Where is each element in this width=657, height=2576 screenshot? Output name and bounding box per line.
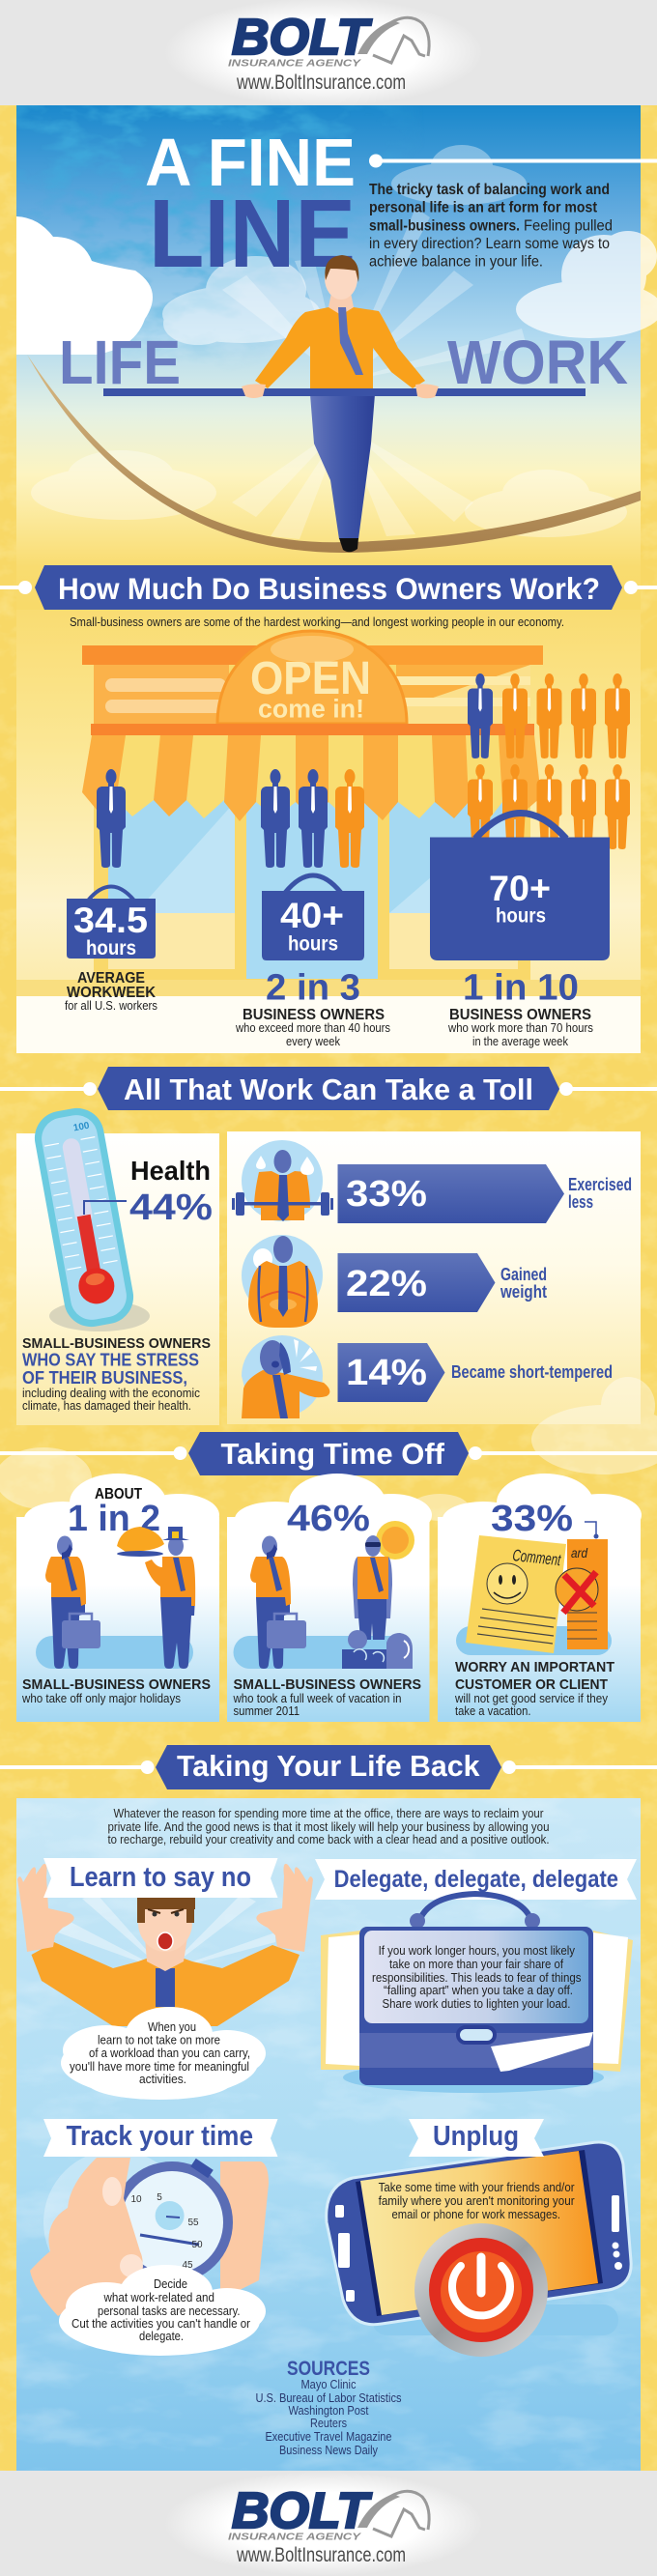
- sources: [255, 2358, 402, 2457]
- briefcase: take on more than your fair share of: [389, 1957, 563, 1971]
- description: SMALL-BUSINESS OWNERS: [22, 1335, 211, 1352]
- open sign: OPEN: [250, 653, 371, 704]
- briefcase: responsibilities. This leads to fear of things: [372, 1970, 582, 1985]
- intro text: Whatever the reason for spending more time at the office, there are ways to reclaim your: [114, 1806, 544, 1820]
- ribbon: [43, 1858, 278, 1898]
- card: major holidays: [16, 1474, 219, 1722]
- phone: [327, 2142, 631, 2357]
- title: a fine line: A FINE: [145, 125, 356, 200]
- sources: Executive Travel Magazine: [265, 2429, 392, 2444]
- bar: 33%: less: [568, 1192, 593, 1212]
- open sign: [217, 631, 407, 724]
- card: full week vacation: summer 2011: [234, 1704, 300, 1718]
- hair: [325, 255, 358, 282]
- ribbon: Unplug: [433, 2121, 519, 2152]
- speech cloud: Cut the activities you can't handle or: [71, 2316, 251, 2331]
- sources: Mayo Clinic: [301, 2377, 357, 2391]
- tip: unplug: [327, 2119, 631, 2357]
- pilgrim hat: [162, 1527, 189, 1540]
- stat: 1 in 10: [430, 673, 630, 1048]
- sources: Business News Daily: [279, 2443, 378, 2457]
- shoe: [339, 538, 358, 552]
- clasp: [458, 2027, 495, 2043]
- title: a fine line: LINE: [149, 180, 356, 288]
- intro text: private life. And the good news is that it most likely will help your business by allowing you: [108, 1819, 549, 1834]
- briefcase: “falling apart” when you take a day off.: [384, 1983, 573, 1997]
- tip: track your time: [30, 2119, 278, 2356]
- bar: 33%: [338, 1164, 632, 1223]
- speech cloud: Decide: [154, 2276, 187, 2291]
- icon: exercise: [232, 1140, 333, 1221]
- stat: 2 in 3: who exceed more than 40 hours: [235, 1021, 390, 1035]
- tightrope: [27, 355, 641, 553]
- stat: 2 in 3: [235, 769, 390, 1048]
- figure: worker on phone: [45, 1536, 100, 1669]
- briefcase: 40+: [280, 896, 344, 935]
- neck and face: [328, 288, 354, 315]
- card: major holidays: who take off only major holidays: [21, 1692, 181, 1705]
- briefcase: [430, 814, 610, 960]
- description: [22, 1335, 211, 1413]
- store wall: [94, 665, 530, 980]
- ribbon: Track your time: [66, 2121, 253, 2152]
- stopwatch in hand: 55: [187, 2218, 199, 2228]
- description: including dealing with the economic: [22, 1387, 200, 1400]
- fingers: [30, 2158, 143, 2316]
- briefcase: hours: [288, 933, 338, 955]
- heading banner: time off: Taking Time Off: [220, 1437, 445, 1471]
- background clouds behind time off: [0, 1377, 657, 1521]
- bar: 22%: weight: [500, 1282, 547, 1302]
- intro paragraph: in every direction? Learn some ways to: [369, 236, 610, 252]
- panel: health stress: [16, 1103, 219, 1425]
- briefcase: 70+: [489, 869, 551, 908]
- thermometer: 100: [72, 1121, 91, 1133]
- callout connector: [585, 1522, 599, 1538]
- phone: family where you aren't monitoring your: [379, 2193, 575, 2208]
- heading banner: life back: Taking Your Life Back: [177, 1749, 480, 1783]
- people grid: [468, 673, 630, 849]
- label: life: LIFE: [59, 328, 181, 397]
- intro text: [108, 1806, 549, 1846]
- panel: toll stats: [227, 1131, 641, 1424]
- handle: [417, 1894, 533, 1929]
- speech cloud: [59, 2265, 266, 2356]
- stopwatch in hand: 10: [130, 2194, 142, 2205]
- speech cloud: what work-related and: [103, 2290, 214, 2304]
- stat: 44%: 44%: [129, 1188, 213, 1228]
- intro text: to recharge, rebuild your creativity and come back with a clear head and a positive outlook.: [108, 1832, 549, 1846]
- shirt: [255, 307, 425, 388]
- ribbon: [409, 2119, 544, 2157]
- sources: Washington Post: [288, 2403, 369, 2418]
- sources: Reuters: [310, 2416, 347, 2430]
- stopwatch in hand: 50: [191, 2240, 203, 2250]
- stat: 2 in 3: every week: [286, 1035, 341, 1048]
- description: OF THEIR BUSINESS,: [22, 1368, 187, 1388]
- figure: vacationer: [342, 1535, 413, 1669]
- stat: 46%: 46%: [287, 1499, 370, 1539]
- person: [97, 769, 126, 868]
- briefcase: hours: [86, 937, 136, 959]
- comment card: Comment: [512, 1546, 562, 1569]
- case body: [359, 1927, 593, 2085]
- card: full week vacation: [227, 1474, 432, 1722]
- awning: [82, 724, 541, 821]
- stat: 1 in 10: in the average week: [472, 1035, 569, 1048]
- briefcase: [67, 887, 156, 959]
- stat: 2 in 3: BUSINESS OWNERS: [243, 1007, 385, 1023]
- roof bar: [82, 645, 543, 665]
- figure: shouting man: [17, 1864, 313, 2026]
- pants: [310, 394, 375, 539]
- sources: U.S. Bureau of Labor Statistics: [255, 2390, 402, 2405]
- paper sticking out: [491, 2032, 593, 2072]
- heading banner: how much: [0, 565, 657, 610]
- stat: 33%: 33%: [491, 1499, 573, 1539]
- tightrope walker: [103, 255, 586, 552]
- intro paragraph: The tricky task of balancing work and: [369, 182, 610, 198]
- arms and shirt: [31, 1942, 300, 2026]
- hero panel: [16, 105, 657, 618]
- speech cloud: personal tasks are necessary.: [98, 2304, 240, 2318]
- card: full week vacation: who took a full week of vacation in: [233, 1692, 402, 1705]
- logo: BOLT: [232, 10, 372, 66]
- raised hands: [17, 1864, 74, 1952]
- speech cloud: learn to not take on more: [98, 2033, 220, 2046]
- heading banner: how much: How Much Do Business Owners Work?: [58, 571, 600, 606]
- storefront illustration: [82, 631, 543, 980]
- torn orange card: ard: [571, 1545, 588, 1560]
- label: work: WORK: [447, 328, 628, 397]
- balance pole: [103, 388, 586, 396]
- tip: learn to say no: [17, 1858, 313, 2100]
- card: client worry: take a vacation.: [455, 1704, 531, 1718]
- logo: [228, 2483, 429, 2543]
- description: WHO SAY THE STRESS: [22, 1351, 199, 1370]
- briefcase: [262, 875, 364, 960]
- section panel: work hours: [16, 610, 641, 1053]
- briefcase: Share work duties to lighten your load.: [383, 1996, 570, 2011]
- stat: average workweek: WORKWEEK: [67, 985, 156, 1001]
- briefcase: [321, 1894, 633, 2093]
- logo: [228, 10, 429, 70]
- intro paragraph: Feeling pulled: [524, 218, 613, 234]
- people row: [261, 769, 364, 868]
- card: client worry: CUSTOMER OR CLIENT: [455, 1676, 608, 1693]
- sources: SOURCES: [287, 2358, 370, 2380]
- icon: sun: [376, 1521, 414, 1560]
- card: client worry: [438, 1474, 642, 1722]
- speech cloud: of a workload than you can carry,: [89, 2046, 250, 2060]
- website url: www.BoltInsurance.com: [236, 72, 406, 94]
- red x: [563, 1572, 596, 1613]
- ribbon: [315, 1859, 637, 1900]
- stat: 1 in 10: 1 in 10: [463, 968, 579, 1009]
- title connector line: [369, 155, 657, 168]
- card: client worry: WORRY AN IMPORTANT: [455, 1659, 614, 1675]
- bar: 22%: Gained: [500, 1265, 547, 1284]
- bar: 33%: Exercised: [568, 1175, 632, 1194]
- ribbon: Learn to say no: [70, 1862, 251, 1893]
- bar: 22%: [338, 1253, 547, 1312]
- hands: [242, 384, 266, 398]
- intro paragraph: small-business owners.: [369, 218, 520, 234]
- logo: INSURANCE AGENCY: [228, 2532, 361, 2543]
- stat: average workweek: AVERAGE: [77, 970, 145, 987]
- briefcase: If you work longer hours, you most likely: [379, 1943, 575, 1958]
- panel: tips: [16, 1798, 641, 2471]
- icon: weight gain: [242, 1235, 323, 1328]
- speech cloud: When you: [148, 2019, 196, 2034]
- comment card: [466, 1535, 566, 1653]
- speech cloud: you'll have more time for meaningful: [70, 2059, 249, 2074]
- luggage: [386, 1633, 413, 1669]
- phone: Take some time with your friends and/or: [379, 2180, 575, 2194]
- stat: 1 in 10: who work more than 70 hours: [447, 1021, 593, 1035]
- header band: [0, 0, 657, 106]
- card: full week vacation: SMALL-BUSINESS OWNERS: [234, 1676, 421, 1693]
- windows and door: [108, 797, 235, 913]
- sky rays: [222, 208, 527, 539]
- stat: average workweek: for all U.S. workers: [65, 999, 157, 1013]
- stat: 1 in 10: BUSINESS OWNERS: [449, 1007, 591, 1023]
- stat: average workweek: [65, 769, 157, 1013]
- white cloud left: [16, 216, 153, 355]
- icon: short-tempered: [242, 1335, 329, 1418]
- stopwatch in hand: [30, 2150, 269, 2316]
- tip: delegate: [315, 1859, 637, 2093]
- stopwatch in hand: 45: [182, 2260, 193, 2271]
- briefcase: 34.5: [73, 901, 148, 940]
- intro paragraph: achieve balance in your life.: [369, 253, 543, 271]
- card: client worry: will not get good service if they: [454, 1692, 609, 1705]
- intro paragraph: [369, 182, 613, 271]
- tie: [338, 307, 363, 375]
- stat: about 1 in 2: 1 in 2: [68, 1499, 160, 1539]
- heading banner: toll: [0, 1067, 657, 1110]
- speech cloud: [61, 2007, 266, 2100]
- stopwatch in hand: 15: [114, 2210, 126, 2220]
- heading banner: life back: [0, 1745, 657, 1789]
- face: [145, 1937, 187, 1971]
- open sign: come in!: [258, 694, 364, 723]
- briefcase: hours: [496, 904, 546, 928]
- card: major holidays: SMALL-BUSINESS OWNERS: [22, 1676, 211, 1693]
- title: a fine line: [145, 125, 356, 288]
- bar: 14%: [338, 1343, 613, 1402]
- power button: [414, 2223, 548, 2357]
- thermometer: [30, 1103, 150, 1331]
- figure: pilgrim with turkey: [117, 1527, 195, 1669]
- description: climate, has damaged their health.: [22, 1399, 191, 1413]
- logo: BOLT: [232, 2483, 372, 2539]
- ribbon: Delegate, delegate, delegate: [334, 1866, 618, 1893]
- translucent clouds: [162, 256, 321, 345]
- speech cloud: activities.: [139, 2072, 186, 2086]
- website url: www.BoltInsurance.com: [236, 2544, 406, 2566]
- bar: 14%: 14%: [346, 1353, 427, 1393]
- subtitle: Small-business owners are some of the hardest working—and longest working people in our economy.: [70, 615, 564, 629]
- phone: email or phone for work messages.: [392, 2207, 560, 2221]
- logo: INSURANCE AGENCY: [228, 58, 361, 70]
- heading banner: time off: [0, 1432, 657, 1475]
- stopwatch in hand: 5: [157, 2192, 162, 2203]
- stat: 2 in 3: 2 in 3: [266, 968, 360, 1009]
- heading banner: toll: All That Work Can Take a Toll: [124, 1073, 533, 1106]
- stat: health: Health: [130, 1156, 211, 1186]
- speech cloud: delegate.: [139, 2329, 184, 2343]
- intro paragraph: personal life is an art form for most: [369, 199, 597, 216]
- stat: about 1 in 2: ABOUT: [95, 1486, 142, 1503]
- figure: worker on phone: [250, 1536, 306, 1669]
- turkey: [117, 1527, 164, 1552]
- bar: 33%: 33%: [346, 1174, 427, 1215]
- footer band: [0, 2471, 657, 2576]
- bar: 22%: 22%: [346, 1264, 427, 1304]
- papers: [321, 1931, 360, 2070]
- bar: 14%: Became short-tempered: [451, 1362, 613, 1382]
- torn orange card: [556, 1539, 608, 1649]
